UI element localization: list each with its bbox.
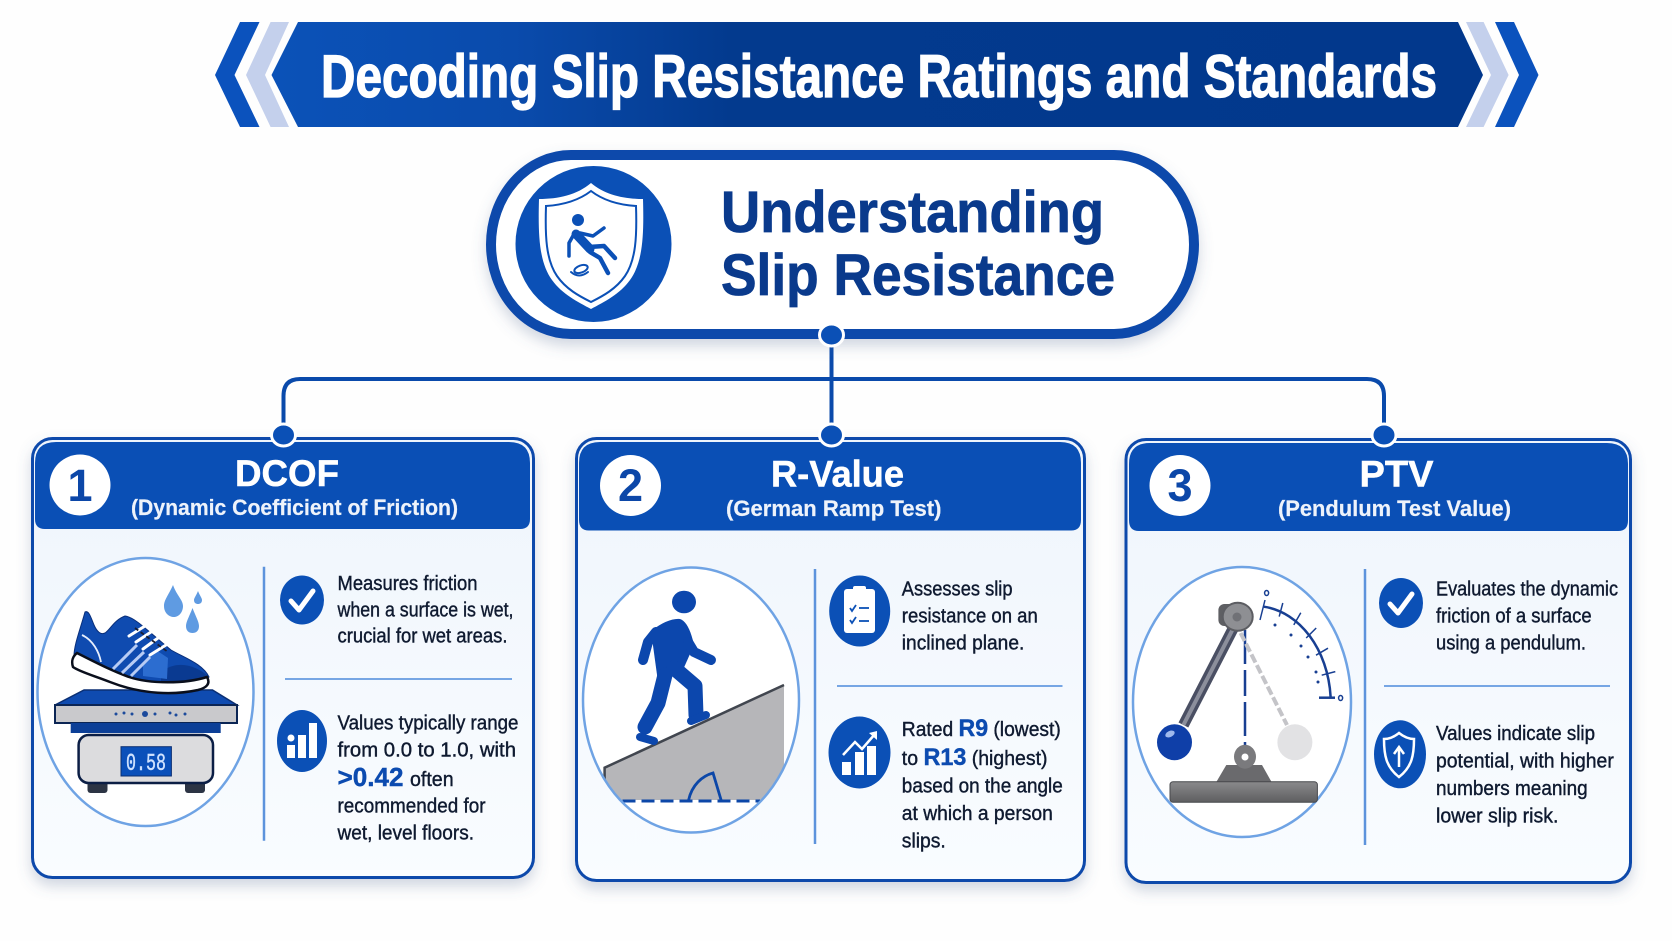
text: pendulum evaluation: Evaluates the dynamic <box>1436 579 1618 601</box>
card header: 3 <box>1167 460 1193 511</box>
divider <box>285 678 512 680</box>
text: wet friction: crucial for wet areas. <box>338 626 508 648</box>
divider <box>837 685 1062 687</box>
text: R9 to R13 rating: based on the angle <box>902 776 1063 798</box>
heading: Slip Resistance <box>721 243 1115 308</box>
panel: DCOF <box>32 438 534 878</box>
card header <box>1129 443 1628 531</box>
card header: (Dynamic Coefficient of Friction) <box>131 495 458 520</box>
text: value range: >0.42 <box>338 762 404 792</box>
central pill: Understanding Slip Resistance <box>491 155 1194 334</box>
text: pendulum evaluation <box>1436 579 1618 654</box>
heading <box>721 180 1115 308</box>
divider <box>814 569 816 844</box>
card header <box>35 442 530 529</box>
text: value range: Values typically range <box>338 712 518 734</box>
text: higher numbers: numbers meaning <box>1436 778 1588 800</box>
text: ramp assessment: resistance on an <box>902 605 1038 627</box>
node: PTV connector dot <box>1372 424 1396 446</box>
text: R9 to R13 rating: slips. <box>902 830 946 852</box>
text: pendulum evaluation: friction of a surface <box>1436 605 1592 627</box>
text: wet friction <box>337 573 514 648</box>
text: ramp assessment <box>902 579 1038 654</box>
text: value range: wet, level floors. <box>337 822 474 844</box>
text: higher numbers <box>1436 723 1614 827</box>
text: wet friction: Measures friction <box>338 573 478 595</box>
heading: Understanding <box>721 180 1104 245</box>
text: value range <box>337 712 518 844</box>
text: ramp assessment: inclined plane. <box>902 632 1024 654</box>
card header: DCOF <box>235 453 339 494</box>
text: higher numbers: Values indicate slip <box>1436 723 1595 745</box>
text: value range: recommended for <box>338 796 486 818</box>
card header: 1 <box>67 460 93 511</box>
connector lines <box>284 335 1384 430</box>
icon: check mark <box>1379 578 1423 628</box>
icon: shield with slipping person <box>516 166 672 322</box>
card header: (Pendulum Test Value) <box>1278 496 1511 521</box>
illustration: pendulum tester <box>1133 567 1351 837</box>
node: pill connector dot <box>820 324 844 346</box>
text: R9 to R13 rating: Rated R9 (lowest) <box>902 715 1061 742</box>
icon: shield with up arrow <box>1374 720 1426 788</box>
illustration: shoe on friction tester <box>38 558 254 826</box>
text: R9 to R13 rating <box>902 715 1063 852</box>
platform <box>55 690 237 705</box>
card header: PTV <box>1360 454 1434 495</box>
text: R9 to R13 rating: at which a person <box>902 803 1053 825</box>
panel: PTV <box>1126 440 1630 882</box>
text: higher numbers: potential, with higher <box>1436 750 1614 772</box>
node: DCOF connector dot <box>272 424 296 446</box>
icon: check mark <box>280 576 324 624</box>
illustration: shoe on friction tester: 0.58 <box>126 751 166 778</box>
text: ramp assessment: Assesses slip <box>902 579 1012 601</box>
card header: R-Value <box>771 454 904 495</box>
illustration: person on ramp <box>583 568 799 832</box>
text: wet friction: when a surface is wet, <box>337 600 514 622</box>
icon: rising chart <box>828 716 890 788</box>
divider <box>1384 685 1610 687</box>
text: value range: often <box>410 769 454 791</box>
icon: bar chart <box>277 710 327 772</box>
text: R9 to R13 rating: to R13 (highest) <box>902 744 1048 771</box>
text: pendulum evaluation: using a pendulum. <box>1436 632 1586 654</box>
node: R-Value connector dot <box>820 424 844 446</box>
card header <box>579 442 1081 530</box>
divider <box>1364 569 1366 845</box>
divider <box>263 567 265 841</box>
text: higher numbers: lower slip risk. <box>1436 805 1558 827</box>
card header: (German Ramp Test) <box>726 496 942 521</box>
icon: clipboard <box>829 576 890 646</box>
shoe <box>74 612 209 686</box>
text: value range: from 0.0 to 1.0, with <box>338 740 516 762</box>
panel: R-Value <box>576 438 1084 880</box>
card header: 2 <box>618 460 643 511</box>
title banner <box>215 22 1538 127</box>
